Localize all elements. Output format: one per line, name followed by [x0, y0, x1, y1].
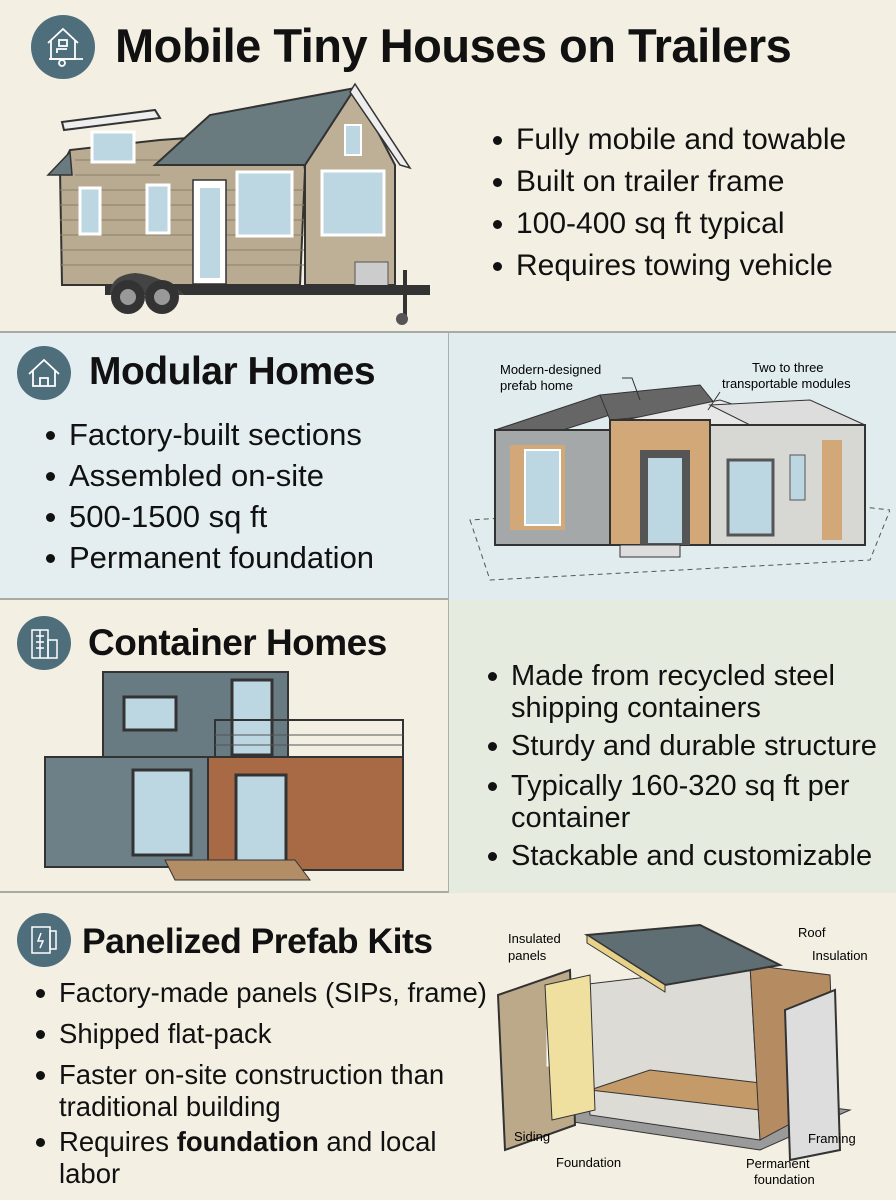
illustration: modular home [469, 360, 890, 580]
bullets: panelized prefab kits: Requires foundation and local [59, 1126, 436, 1157]
bullets: modular homes [46, 417, 374, 575]
bullets: modular homes: Factory-built sections [69, 417, 362, 452]
bullets: mobile tiny houses: Requires towing vehicle [516, 249, 833, 282]
bullets: mobile tiny houses: Built on trailer frame [516, 165, 784, 198]
label: transportable modules: Two to three [752, 360, 824, 375]
illustration: panelized kit: panels [508, 948, 547, 963]
bullets: modular homes: 500-1500 sq ft [69, 499, 267, 534]
icon: house [17, 346, 71, 400]
bullets: mobile tiny houses: Fully mobile and towable [516, 123, 846, 156]
illustration: panelized kit: Roof [798, 925, 826, 940]
section 3 background [0, 600, 896, 893]
title: Mobile Tiny Houses on Trailers [115, 19, 791, 72]
illustration: tiny house on trailer [46, 82, 430, 325]
bullets: panelized prefab kits: Shipped flat-pack [59, 1018, 272, 1049]
bullets: container homes: container [511, 802, 630, 834]
bullets: container homes: Made from recycled steel [511, 660, 835, 692]
illustration: panelized kit: foundation [754, 1172, 815, 1187]
bullets: container homes: shipping containers [511, 692, 761, 724]
illustration: panelized kit: Insulated [508, 931, 561, 946]
bullets: modular homes: Permanent foundation [69, 540, 374, 575]
heading: container homes: Container Homes [88, 622, 387, 663]
bullets: modular homes: Assembled on-site [69, 458, 324, 493]
illustration: panelized kit: Framing [808, 1131, 856, 1146]
illustration: modular home: prefab home [500, 378, 573, 393]
bullets: panelized prefab kits [36, 977, 487, 1189]
bullets: container homes: Sturdy and durable structure [511, 730, 877, 762]
section 1 background [0, 0, 896, 333]
heading: modular homes: Modular Homes [89, 350, 375, 393]
illustration: panelized kit: Permanent [746, 1156, 810, 1171]
bullets: panelized prefab kits: traditional building [59, 1091, 281, 1122]
section 2 background [0, 333, 896, 600]
illustration: container homes [44, 671, 404, 880]
bullets: container homes: Stackable and customizable [511, 840, 872, 872]
bullets: container homes [488, 660, 877, 872]
illustration: modular home: transportable modules [722, 376, 851, 391]
icon: tiny house trailer [31, 15, 95, 79]
bullets: mobile tiny houses [493, 123, 846, 282]
icon: panel [17, 913, 71, 967]
illustration: panelized kit: Siding [514, 1129, 550, 1144]
bullets: panelized prefab kits: Factory-made panels (SIPs, frame) [59, 977, 487, 1008]
bullets: container homes: Typically 160-320 sq ft per [511, 770, 850, 802]
illustration: panelized kit: Foundation [556, 1155, 621, 1170]
bullets: panelized prefab kits: Faster on-site construction than [59, 1059, 444, 1090]
icon: building [17, 616, 71, 670]
bullets: mobile tiny houses: 100-400 sq ft typical [516, 207, 784, 240]
heading: panelized prefab kits: Panelized Prefab Kits [82, 921, 433, 961]
label: modern-designed prefab home: Modern-designed [500, 362, 601, 377]
section 4 background [0, 893, 896, 1200]
illustration: panelized kit: Insulation [812, 948, 868, 963]
illustration: panelized kit [497, 924, 868, 1187]
bullets: panelized prefab kits: labor [59, 1158, 120, 1189]
